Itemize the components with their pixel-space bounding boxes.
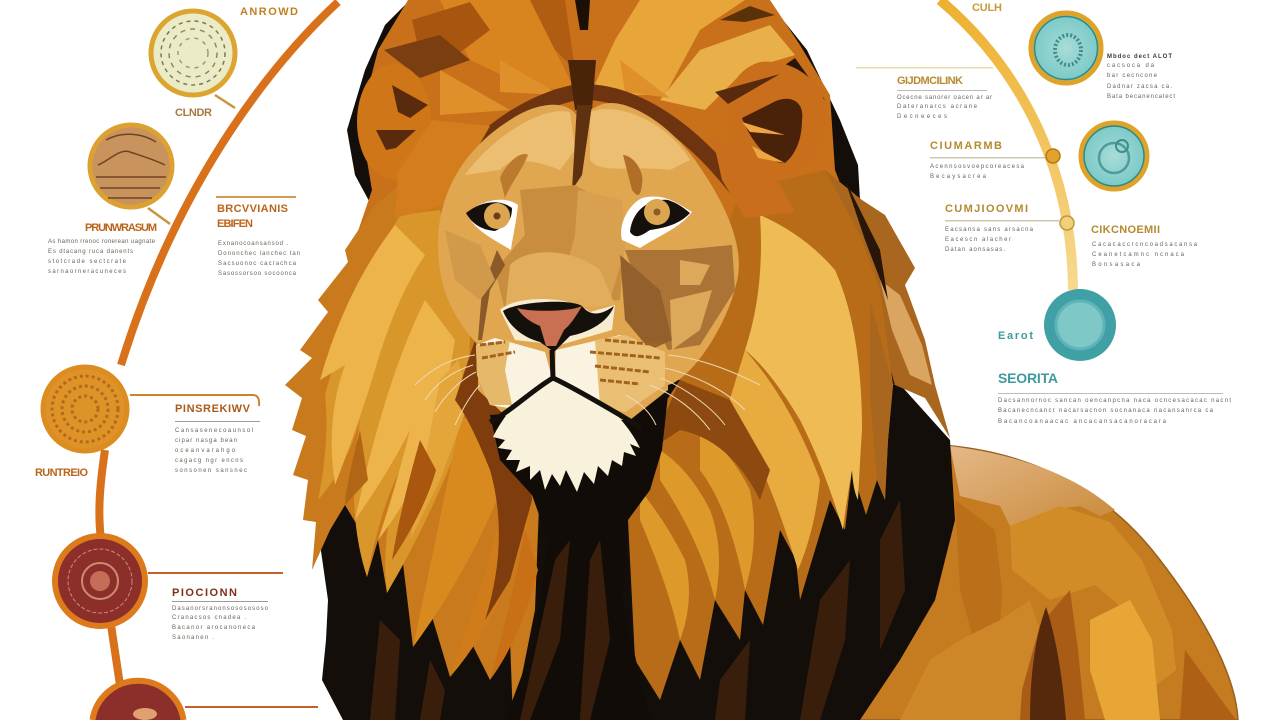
text block: seorita: [998, 370, 1231, 425]
black mane silhouette: [318, 0, 955, 720]
node: golden knot: [1046, 149, 1060, 163]
mouth lines: [490, 350, 642, 428]
circle: top left cream texture: [151, 11, 235, 95]
text block: cikcnoemii: CIKCNOEMII: [1091, 224, 1160, 236]
right ear: [712, 62, 827, 218]
text block: seorita: Bacanecncancr nacarsacnon socnanaca nacansanrca ca: [998, 408, 1214, 414]
text block: cumjioovmi: Eacsansa sans arsacna: [945, 227, 1034, 233]
text block: top right: Dadnar zacsa ca.: [1107, 84, 1172, 90]
muzzle left tan: [476, 340, 512, 405]
lower chest strands: [370, 500, 905, 720]
top orange mane: [355, 0, 860, 380]
circle: teal cell: [1081, 123, 1147, 189]
text block: pinsrekiwv: sonsonen sansnec: [175, 468, 247, 474]
node: small ring: [1060, 216, 1074, 230]
text block: prunwrasum: stotcrade sectcrate: [48, 259, 127, 265]
circle: orange texture: [43, 367, 127, 451]
text block: seorita: Bacancoanaacac ancacansacanoracara: [998, 419, 1167, 425]
left ear: [357, 64, 490, 218]
muzzle right tan: [595, 335, 665, 412]
text block: brcvvianis: EBIFEN: [217, 218, 253, 230]
muzzle white right: [555, 335, 665, 412]
right cheek shading: [625, 245, 735, 350]
top mane streaks: [384, 0, 825, 115]
text block: top right: Mbdoc dect ALOT: [1107, 54, 1172, 60]
text block: gijdmcilink: GIJDMCILINK: [897, 75, 963, 87]
text block: gijdmcilink: Dateranarcs acrane: [897, 104, 978, 110]
black streaks right edge: [845, 180, 895, 385]
nose: [503, 302, 614, 352]
text block: ciumarmb: Acennsosvoepcoreacesa: [930, 164, 1025, 170]
text block: pinsrekiwv: Cansasenecoaunsol: [175, 428, 253, 434]
whiskers: [415, 355, 760, 430]
right mane gold strands: [640, 430, 754, 640]
text block: piocionn: Bacanor arocanoneca: [172, 625, 256, 631]
chin shadow and chest centre: [490, 395, 668, 720]
text block: cumjioovmi: CUMJIOOVMI: [945, 203, 1028, 215]
text block: cumjioovmi: Eacescn alacher: [945, 237, 1011, 243]
right eye: [621, 196, 692, 248]
text block: prunwrasum: As hamon rrenoc ronerean uagnate: [48, 239, 156, 245]
brow centre shade: [572, 105, 592, 190]
head base: [438, 103, 739, 420]
text block: ciumarmb: [930, 140, 1045, 180]
muzzle white left: [476, 338, 552, 408]
centre parting: [568, 60, 596, 110]
text block: piocionn: Cranacsos cnadea .: [172, 615, 246, 621]
right fringe tan: [880, 280, 932, 385]
label: clndr: CLNDR: [175, 107, 212, 119]
text block: top right: bar cecncone: [1107, 73, 1158, 79]
text block: brcvvianis: BRCVVIANIS: [217, 203, 288, 215]
forehead left highlight: [465, 111, 575, 175]
text block: piocionn: Saonanen .: [172, 635, 214, 641]
circle: red rings: [55, 536, 145, 626]
lion illustration: [285, 0, 1238, 720]
text block: cikcnoemii: Bonsasaca: [1092, 262, 1141, 268]
right mane base: [628, 170, 893, 700]
text block: cikcnoemii: [1091, 224, 1198, 268]
right mane bright strands: [725, 215, 862, 570]
label: culh: CULH: [972, 2, 1002, 14]
text block: brcvvianis: Exnanocoansansod .: [218, 241, 288, 247]
text block: piocionn: [148, 572, 283, 641]
text block: brcvvianis: Dononchec lanchec tan: [218, 251, 300, 257]
circle: bottom red: [92, 681, 184, 720]
text block: gijdmcilink: Ocecne sanorer oacen ar ar: [897, 95, 992, 101]
text block: ciumarmb: Becaysacrea: [930, 174, 987, 180]
nose bridge: [495, 185, 625, 310]
text block: pinsrekiwv: cipar nasga bean: [175, 438, 237, 444]
text block: seorita: SEORITA: [998, 370, 1058, 386]
brow marks: [500, 154, 528, 198]
dark forehead band: [445, 92, 745, 200]
text block: ciumarmb: CIUMARMB: [930, 140, 1002, 152]
text block: cumjioovmi: Datan aonsasas.: [945, 247, 1005, 253]
circle: tan strata: [90, 125, 172, 207]
text block: piocionn: PIOCIONN: [172, 587, 237, 599]
left mane gold strands: [318, 210, 538, 680]
text block: prunwrasum: PRUNWRASUM: [85, 222, 157, 234]
text block: gijdmcilink: Decneeces: [897, 114, 947, 120]
label: anrowd: ANROWD: [240, 6, 298, 18]
text block: pinsrekiwv: [130, 395, 260, 474]
right mane brown: [650, 300, 893, 500]
text block: prunwrasum: sarnaorneracuneces: [48, 269, 126, 275]
muzzle bridge top: [505, 252, 615, 312]
whisker spots: [480, 340, 660, 384]
left timeline arc: [99, 2, 338, 685]
text block: piocionn: Dasanorsranonsososososo: [172, 606, 269, 612]
left mane base: [285, 185, 540, 720]
circle: teal disc: [1044, 289, 1116, 361]
text block: prunwrasum: [48, 222, 157, 275]
text block: top right: [1107, 54, 1175, 100]
chin beard: [493, 380, 640, 492]
text block: top right: cacsoca da: [1107, 63, 1155, 69]
text block: brcvvianis: Sasossorsoo socoonca: [218, 271, 297, 277]
text block: cikcnoemii: Ceanetcamnc ncnaca: [1092, 252, 1185, 258]
text block: brcvvianis: Sacsuonoc cacrachca: [218, 261, 297, 267]
text block: gijdmcilink: [856, 67, 993, 120]
text block: seorita: Dacsannornoc sancan oencanpcna naca ocncesacacac nacnt: [998, 398, 1231, 404]
text block: pinsrekiwv: PINSREKIWV: [175, 403, 251, 415]
text block: top right: Bata becanencalect: [1107, 94, 1175, 100]
lion body: [850, 445, 1238, 720]
label: earot: Earot: [998, 330, 1033, 342]
label: runtreio: RUNTREIO: [35, 467, 88, 479]
lion face: [415, 103, 760, 492]
left cheek fold: [478, 250, 505, 340]
left mane bright strands: [320, 225, 470, 540]
text block: cumjioovmi: [945, 203, 1060, 253]
circle: teal fingerprint: [1031, 13, 1101, 83]
text block: prunwrasum: Es dtacang ruca danents: [48, 249, 133, 255]
left eye: [466, 200, 518, 250]
left mane brown: [345, 340, 532, 620]
text block: pinsrekiwv: oceanvarahgo: [175, 448, 236, 454]
text block: cikcnoemii: Cacacaccrcncoadsacansa: [1092, 242, 1198, 248]
text block: brcvvianis: [216, 196, 300, 277]
right timeline arc: [940, 0, 1073, 290]
forehead right highlight: [590, 109, 690, 170]
text block: pinsrekiwv: cagacg ngr encns: [175, 458, 243, 464]
rule: bottom left: [185, 706, 318, 708]
nose top white: [500, 299, 615, 345]
right brown fringe: [800, 170, 950, 438]
